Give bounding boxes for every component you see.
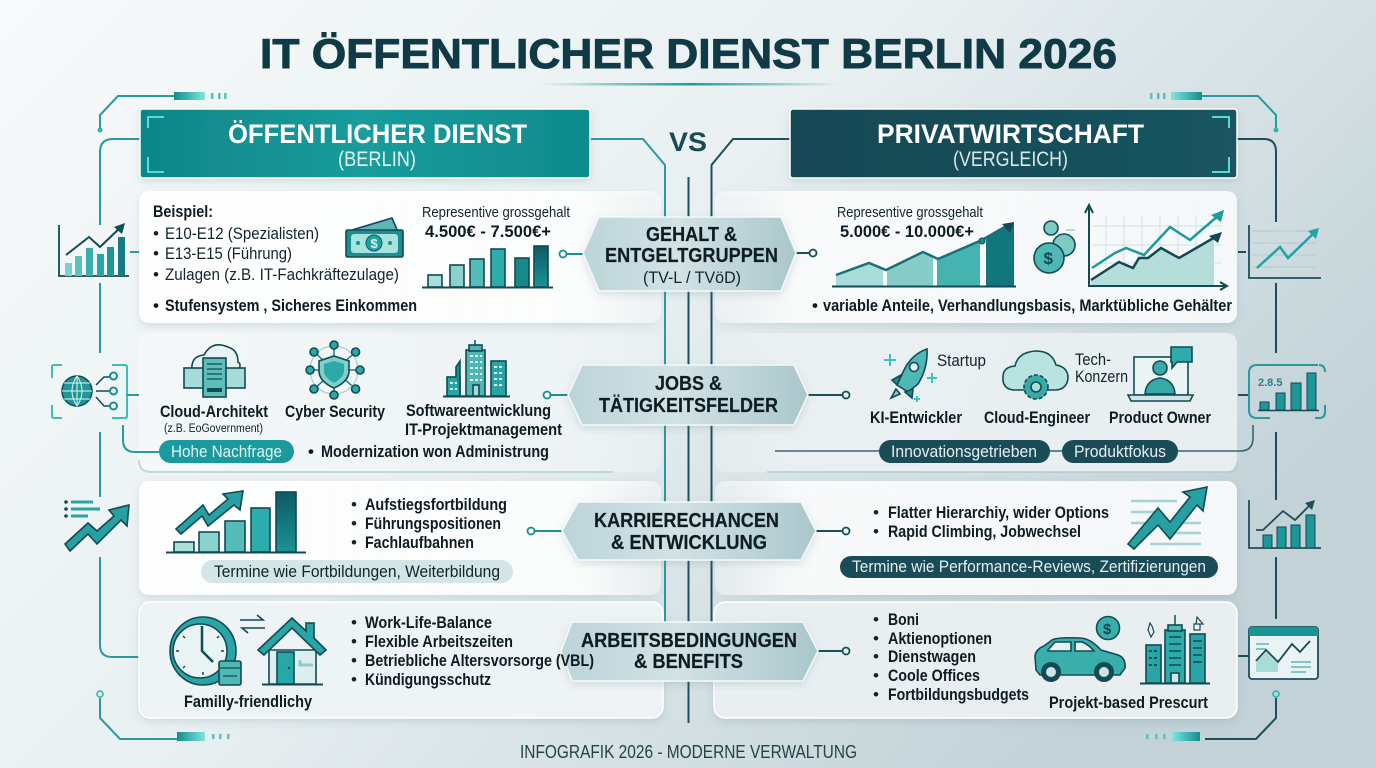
- list: private career: •: [873, 522, 879, 541]
- icon: dollar coin: [1096, 616, 1120, 640]
- side icon: list with rising arrow: [64, 500, 129, 551]
- list: career paths: Fachlaufbahnen: [365, 533, 474, 552]
- text block: Beispiel list: [153, 202, 417, 315]
- list: career paths: [351, 495, 507, 552]
- icon: house: [258, 618, 326, 684]
- section label: Gehalt und Entgeltgruppen: (TV-L / TVöD): [643, 268, 741, 287]
- text block: Beispiel list: Stufensystem , Sicheres Einkommen: [165, 296, 417, 315]
- circuit frame lines: [100, 139, 1276, 723]
- section label: Gehalt und Entgeltgruppen: ENTGELTGRUPPEN: [605, 245, 778, 267]
- label: Startup: Startup: [937, 351, 986, 370]
- label: Tech-Konzern: Konzern: [1075, 367, 1128, 386]
- text: Modernization: Modernization won Administrung: [321, 442, 549, 461]
- corner decoration: bottom right: [1146, 691, 1279, 741]
- side icon: bar chart with arrow: [59, 223, 139, 276]
- header: Privatwirtschaft: [790, 109, 1237, 178]
- icon: cyber security network: [306, 341, 364, 399]
- text block: Beispiel list: E13-E15 (Führung): [165, 244, 292, 263]
- panel: Arbeitsbedingungen, Privatwirtschaft: [714, 602, 1237, 718]
- pill: Termine: Termine wie Performance-Reviews, Zertifizierungen: [852, 557, 1206, 576]
- label: Projekt-based Prescurt: Projekt-based Prescurt: [1049, 693, 1208, 712]
- list: private career: [873, 503, 1109, 541]
- side icon: browser window chart: [1238, 627, 1318, 679]
- list: private benefits: Aktienoptionen: [888, 629, 992, 648]
- salary range: 4.500€ - 7.500€+: [425, 222, 551, 241]
- label: Familly-friendlichy: Familly-friendlichy: [184, 692, 312, 711]
- list: private benefits: •: [873, 610, 879, 629]
- list: private career: •: [873, 503, 879, 522]
- labels: public sector jobs: [160, 401, 562, 439]
- text block: Beispiel list: Zulagen (z.B. IT-Fachkräftezulage): [165, 265, 399, 284]
- side icon: line chart: [1238, 225, 1321, 278]
- text block: Beispiel list: Beispiel:: [153, 202, 213, 221]
- icon: dollar coin: $: [1103, 621, 1112, 638]
- list: private benefits: •: [873, 629, 879, 648]
- section label: Arbeitsbedingungen und Benefits: ARBEITSBEDINGUNGEN: [581, 630, 797, 652]
- text: private sector pay: variable Anteile, Verhandlungsbasis, Marktübliche Gehälter: [823, 296, 1232, 315]
- section label: Gehalt und Entgeltgruppen: [583, 217, 796, 291]
- list: public benefits: •: [351, 651, 357, 670]
- list: career paths: Führungspositionen: [365, 514, 501, 533]
- list: private career: Flatter Hierarchiy, wider Options: [888, 503, 1109, 522]
- list: private benefits: •: [873, 666, 879, 685]
- section label: Arbeitsbedingungen und Benefits: & BENEFITS: [634, 651, 743, 673]
- list: private benefits: Fortbildungsbudgets: [888, 685, 1029, 704]
- labels: public sector jobs: IT-Projektmanagement: [405, 420, 562, 439]
- list item overlapping section label: Betriebliche Altersvorsorge: Betriebliche Altersvorsorge (VBL): [365, 651, 594, 670]
- text: Modernization: •: [308, 442, 314, 461]
- icon: car: [1035, 638, 1125, 682]
- header: Öffentlicher Dienst: (BERLIN): [338, 148, 416, 171]
- side icon: bar chart dashboard: [1238, 365, 1325, 418]
- pill: Innovationsgetrieben: Innovationsgetrieben: [891, 442, 1037, 461]
- icon: rocket: [884, 349, 937, 402]
- pill: Hohe Nachfrage: Hohe Nachfrage: [171, 442, 282, 461]
- connector lines to section labels: [528, 250, 850, 654]
- corner decoration: bottom left: [97, 691, 230, 741]
- list: private benefits: •: [873, 647, 879, 666]
- icon: cloud server: [184, 345, 245, 397]
- list: career paths: •: [351, 495, 357, 514]
- panel: Jobs, Privatwirtschaft: [715, 333, 1253, 472]
- list: public benefits: Kündigungsschutz: [365, 670, 491, 689]
- panel: Karriere, öffentlicher Dienst: [139, 481, 661, 595]
- text block: Beispiel list: •: [153, 244, 159, 263]
- side icon: bars and arrow: [1249, 500, 1321, 548]
- pill: Produktfokus: Produktfokus: [1074, 442, 1166, 461]
- labels: public sector jobs: Cyber Security: [285, 402, 385, 421]
- header: Öffentlicher Dienst: [140, 109, 590, 178]
- section label: Jobs und Tätigkeitsfelder: TÄTIGKEITSFELDER: [599, 394, 778, 417]
- icon: money bills: $: [370, 236, 378, 251]
- text block: Beispiel list: •: [153, 224, 159, 243]
- title: IT ÖFFENTLICHER DIENST BERLIN 2026: [260, 30, 1117, 77]
- icon: skyscrapers: [1140, 615, 1210, 684]
- icon: office buildings: [443, 340, 510, 396]
- labels: private sector jobs: [870, 408, 1211, 427]
- list: public benefits: Flexible Arbeitszeiten: [365, 632, 513, 651]
- labels: public sector jobs: Softwareentwicklung: [406, 401, 551, 420]
- icon: cloud with gear: [1003, 351, 1068, 399]
- section label: Karrierechancen und Entwicklung: [562, 502, 816, 560]
- list: private benefits: •: [873, 685, 879, 704]
- labels: private sector jobs: Product Owner: [1109, 408, 1211, 427]
- section label: Jobs und Tätigkeitsfelder: JOBS &: [655, 373, 722, 395]
- panel: Karriere, Privatwirtschaft: [715, 481, 1237, 595]
- icon: laptop with person: [1128, 347, 1193, 401]
- icon: money bills: [346, 218, 403, 257]
- list: public benefits: [351, 613, 513, 689]
- list: private benefits: Boni: [888, 610, 919, 629]
- panel: Gehalt, öffentlicher Dienst: [139, 191, 661, 323]
- text block: Beispiel list: •: [153, 296, 159, 315]
- text block: Beispiel list: •: [153, 265, 159, 284]
- list: career paths: Aufstiegsfortbildung: [365, 495, 507, 514]
- list: private benefits: Dienstwagen: [888, 647, 976, 666]
- list: career paths: •: [351, 533, 357, 552]
- text: private sector pay: •: [812, 296, 818, 315]
- footer: INFOGRAFIK 2026 - MODERNE VERWALTUNG: [520, 742, 857, 762]
- header: Öffentlicher Dienst: ÖFFENTLICHER DIENST: [228, 119, 527, 149]
- salary range: [837, 204, 984, 241]
- list: public benefits: •: [351, 632, 357, 651]
- icon: arrow with lines: [1128, 487, 1207, 549]
- list: public benefits: •: [351, 613, 357, 632]
- vs label: VS: [669, 127, 707, 157]
- panel: Jobs, öffentlicher Dienst: [139, 333, 661, 472]
- connector to pills: [775, 425, 1253, 451]
- bar chart: [422, 246, 553, 288]
- label: Tech-Konzern: [1075, 350, 1128, 386]
- list: public benefits: •: [351, 670, 357, 689]
- bar chart with rising arrow: [166, 491, 306, 552]
- area chart: [832, 222, 1016, 286]
- icon: clock: [170, 617, 241, 685]
- side icon: bar chart dashboard: 2.8.5: [1258, 377, 1282, 389]
- salary range: Representive grossgehalt: [422, 204, 571, 221]
- side icon: globe network: [52, 365, 159, 452]
- icon: swap arrows: [240, 615, 265, 633]
- line chart: [1085, 205, 1227, 290]
- salary range: [422, 204, 571, 241]
- list: private benefits: Coole Offices: [888, 666, 980, 685]
- corner decoration: top left: [98, 92, 226, 132]
- section label: Arbeitsbedingungen und Benefits: [561, 622, 818, 681]
- salary range: Representive grossgehalt: [837, 204, 984, 221]
- labels: private sector jobs: KI-Entwickler: [870, 408, 962, 427]
- text block: Beispiel list: E10-E12 (Spezialisten): [165, 224, 319, 243]
- header: Privatwirtschaft: (VERGLEICH): [953, 148, 1068, 171]
- section label: Karrierechancen und Entwicklung: & ENTWICKLUNG: [611, 532, 767, 554]
- icon: coins: $: [1044, 249, 1054, 268]
- section label: Gehalt und Entgeltgruppen: GEHALT &: [646, 224, 737, 246]
- salary range: 5.000€ - 10.000€+: [840, 222, 974, 241]
- labels: public sector jobs: Cloud-Architekt: [160, 402, 268, 421]
- pill: Termine: Termine wie Fortbildungen, Weiterbildung: [214, 562, 500, 581]
- labels: public sector jobs: (z.B. EoGovernment): [164, 423, 263, 435]
- corner decoration: top right: [1150, 92, 1278, 132]
- icon: coins: [1034, 221, 1075, 273]
- header: Privatwirtschaft: PRIVATWIRTSCHAFT: [877, 119, 1144, 149]
- label: Tech-Konzern: Tech-: [1075, 350, 1111, 369]
- list: career paths: •: [351, 514, 357, 533]
- panel: Gehalt, Privatwirtschaft: [715, 191, 1237, 323]
- list: public benefits: Work-Life-Balance: [365, 613, 492, 632]
- labels: private sector jobs: Cloud-Engineer: [984, 408, 1090, 427]
- list: private career: Rapid Climbing, Jobwechsel: [888, 522, 1081, 541]
- section label: Jobs und Tätigkeitsfelder: [568, 365, 808, 425]
- section label: Karrierechancen und Entwicklung: KARRIERECHANCEN: [594, 510, 779, 532]
- list: private benefits: [873, 610, 1029, 704]
- panel: Arbeitsbedingungen, öffentlicher Dienst: [139, 602, 663, 718]
